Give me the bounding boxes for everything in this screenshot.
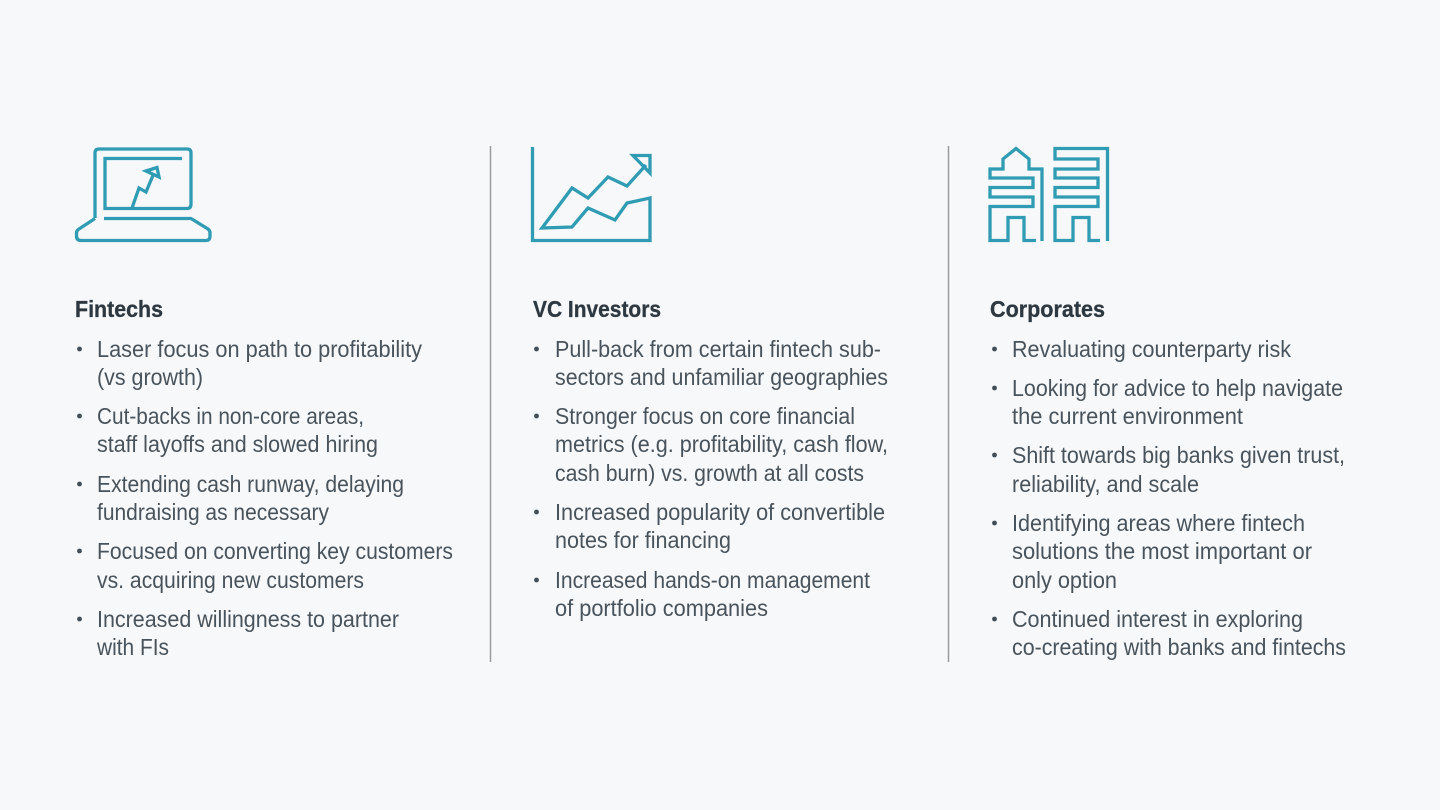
list: Fintechs points: staff layoffs and slowed hiring xyxy=(97,431,378,457)
list: Corporates points: co-creating with banks and fintechs xyxy=(1012,634,1346,660)
list: Fintechs points: Increased willingness to partner xyxy=(97,606,399,632)
heading: Corporates: Corporates xyxy=(990,296,1105,322)
list: Corporates points: Identifying areas where fintech xyxy=(1012,510,1305,536)
list: Fintechs points: with FIs xyxy=(96,634,169,660)
list: Corporates points: Looking for advice to help navigate xyxy=(1012,375,1343,401)
list: VC Investors points: Pull-back from certain fintech sub- xyxy=(555,336,881,362)
list: VC Investors points: of portfolio companies xyxy=(555,595,768,621)
list: Fintechs points: Extending cash runway, delaying xyxy=(97,471,404,497)
list: Fintechs points: vs. acquiring new customers xyxy=(97,567,364,593)
list: VC Investors points xyxy=(534,336,888,621)
list: Corporates points: Revaluating counterparty risk xyxy=(1012,336,1291,362)
icon: laptop with rising arrow xyxy=(76,149,210,240)
list: Fintechs points: Cut-backs in non-core areas, xyxy=(97,403,364,429)
list: Corporates points: Shift towards big banks given trust, xyxy=(1012,442,1345,468)
list: VC Investors points: cash burn) vs. growth at all costs xyxy=(555,460,864,486)
list: Fintechs points: fundraising as necessary xyxy=(97,499,329,525)
list: Fintechs points: Laser focus on path to profitability xyxy=(97,336,422,362)
heading: VC Investors: VC Investors xyxy=(533,296,661,322)
list: VC Investors points: Stronger focus on core financial xyxy=(555,403,855,429)
list: Fintechs points xyxy=(77,336,453,660)
list: VC Investors points: sectors and unfamiliar geographies xyxy=(555,364,888,390)
list: Corporates points: the current environment xyxy=(1012,403,1243,429)
list: Corporates points: only option xyxy=(1012,567,1117,593)
list: VC Investors points: metrics (e.g. profitability, cash flow, xyxy=(555,431,888,457)
list: Corporates points xyxy=(992,336,1346,660)
panel: VC Investors xyxy=(532,147,888,621)
list: Corporates points: solutions the most important or xyxy=(1012,538,1312,564)
panel: Corporates xyxy=(990,148,1346,660)
list: VC Investors points: Increased popularity of convertible xyxy=(555,499,885,525)
list: Fintechs points: Focused on converting key customers xyxy=(97,538,453,564)
list: Corporates points: Continued interest in exploring xyxy=(1012,606,1303,632)
list: VC Investors points: Increased hands-on management xyxy=(555,567,870,593)
list: Corporates points: reliability, and scale xyxy=(1012,471,1199,497)
list: Fintechs points: (vs growth) xyxy=(97,364,203,390)
list: VC Investors points: notes for financing xyxy=(555,527,731,553)
heading: Fintechs: Fintechs xyxy=(75,296,163,322)
icon: office buildings xyxy=(990,148,1108,241)
panel: Fintechs xyxy=(75,149,453,660)
icon: area line chart with arrow xyxy=(532,147,650,240)
